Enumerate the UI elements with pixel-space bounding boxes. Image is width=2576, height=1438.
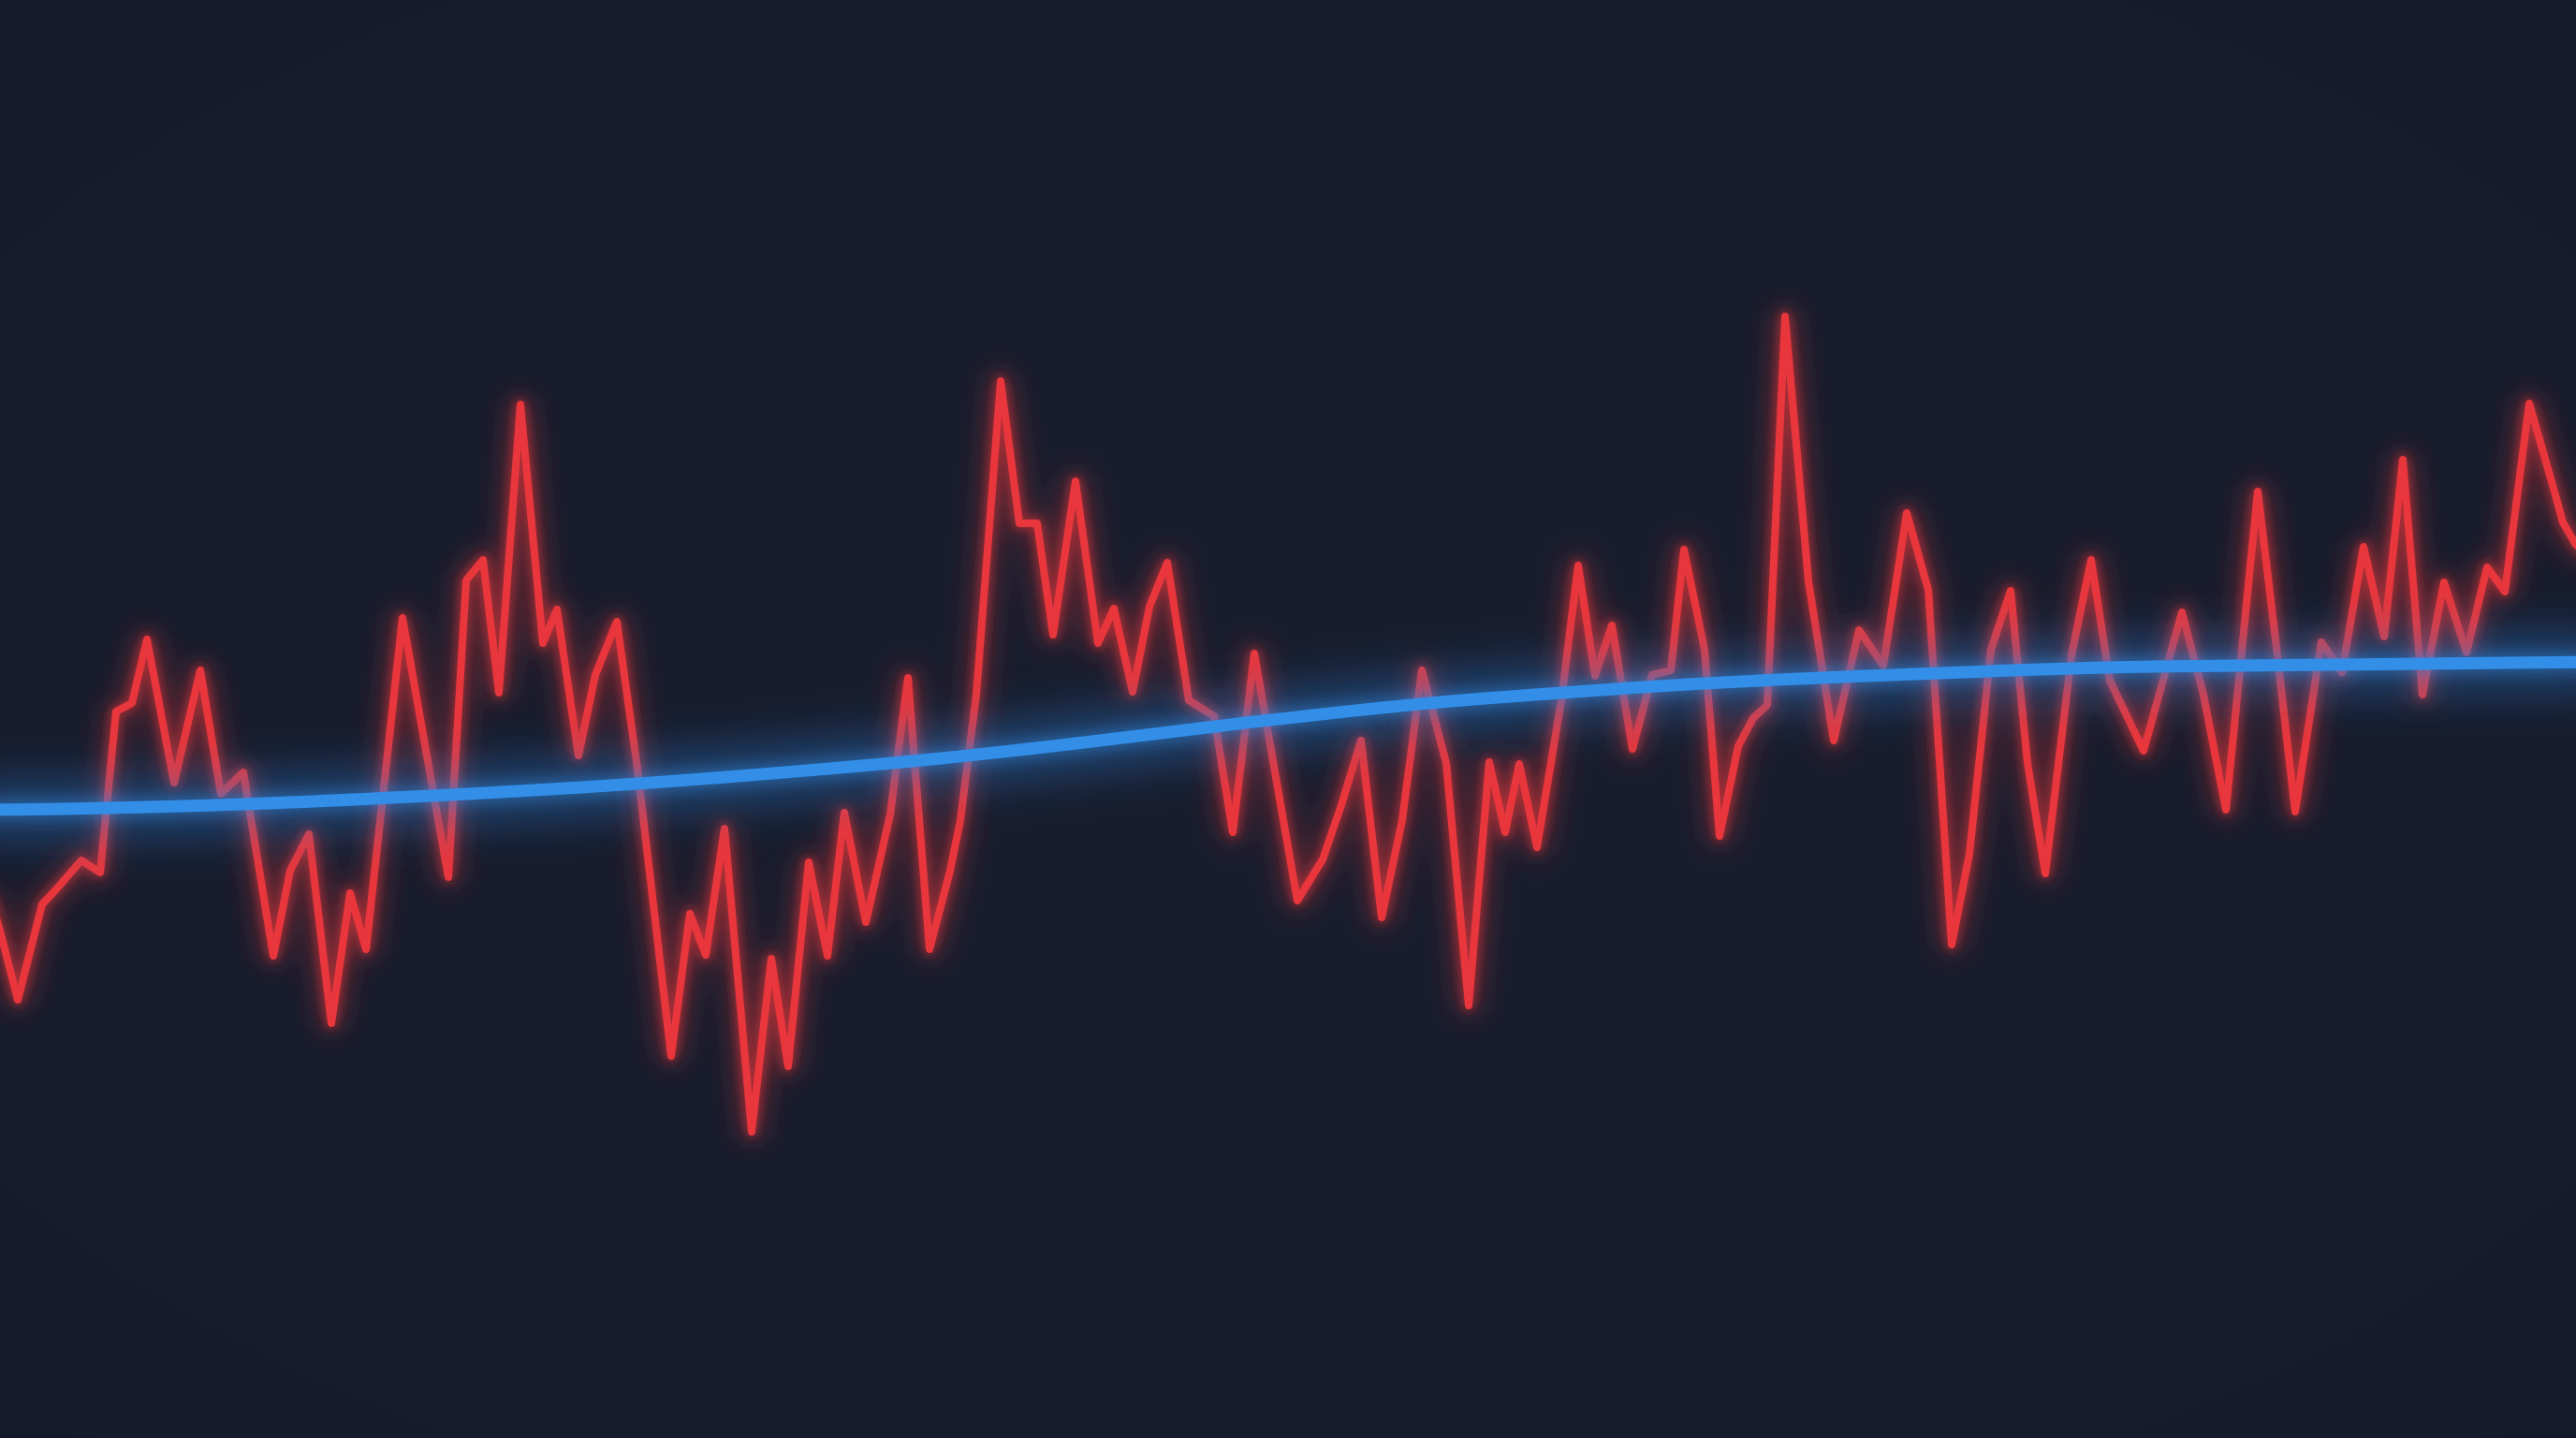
- red noisy signal line with glow: [0, 316, 2576, 1132]
- blue smooth trend line with glow: [0, 662, 2576, 810]
